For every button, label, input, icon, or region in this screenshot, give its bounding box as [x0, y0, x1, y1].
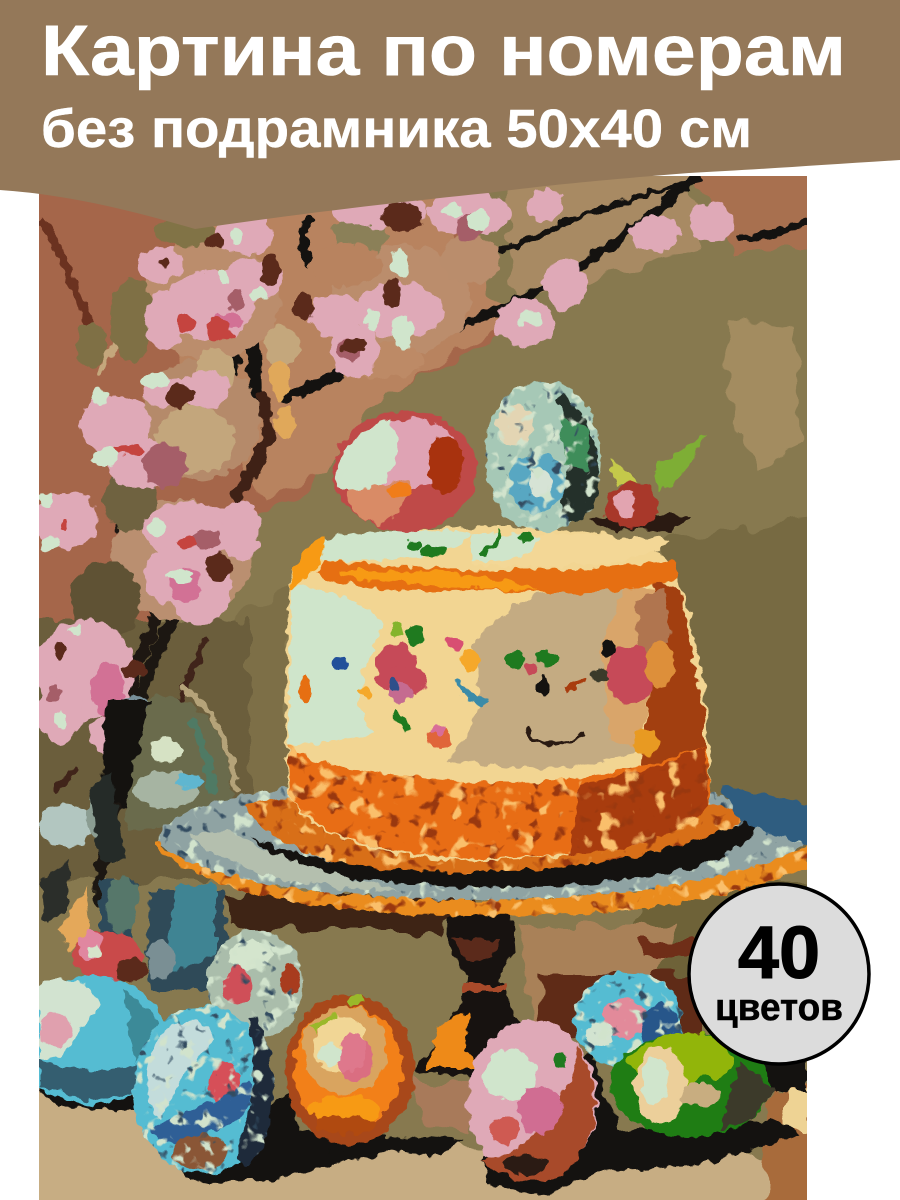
cake lower band — [288, 745, 710, 858]
cake plate and stand — [155, 776, 815, 1075]
black shadows — [39, 1052, 807, 1196]
cake body — [286, 527, 710, 860]
top eggs and flower — [333, 380, 706, 532]
olive and tan patches between blossoms — [70, 209, 500, 640]
cake floral details — [299, 532, 674, 755]
egg: blue centre-left — [133, 1006, 273, 1174]
blossom branches — [45, 176, 812, 900]
flower and leaves — [590, 432, 706, 532]
egg: orange — [285, 995, 415, 1145]
egg: blue right — [574, 972, 682, 1068]
plate orange tier — [244, 797, 742, 875]
painting background wall — [39, 176, 807, 1160]
plate black ring — [190, 815, 757, 890]
badge: 40 colours: 40 — [738, 911, 820, 994]
blue egg — [485, 380, 601, 532]
small pink flower by the vase — [72, 929, 146, 982]
blossom clusters — [31, 189, 734, 753]
cake base — [286, 527, 710, 860]
painting: Easter cake with eggs and blossoms — [39, 176, 807, 1200]
egg: pink — [467, 1020, 597, 1181]
table surface — [39, 1076, 807, 1200]
stand — [414, 914, 521, 1078]
egg: left blue — [39, 974, 164, 1108]
header banner — [0, 0, 900, 229]
glass vase — [37, 688, 236, 990]
plate top — [157, 776, 805, 900]
pink egg — [333, 411, 477, 531]
foreground Easter eggs — [16, 930, 807, 1195]
plate orange rim — [155, 840, 807, 916]
badge: 40 colours — [689, 884, 869, 1064]
egg: pale back — [207, 930, 303, 1040]
title: Картина по номерам — [41, 12, 846, 91]
subtitle: без подрамника 50х40 см — [41, 99, 752, 159]
badge: 40 colours: цветов — [715, 987, 843, 1029]
egg: green — [610, 1032, 775, 1137]
